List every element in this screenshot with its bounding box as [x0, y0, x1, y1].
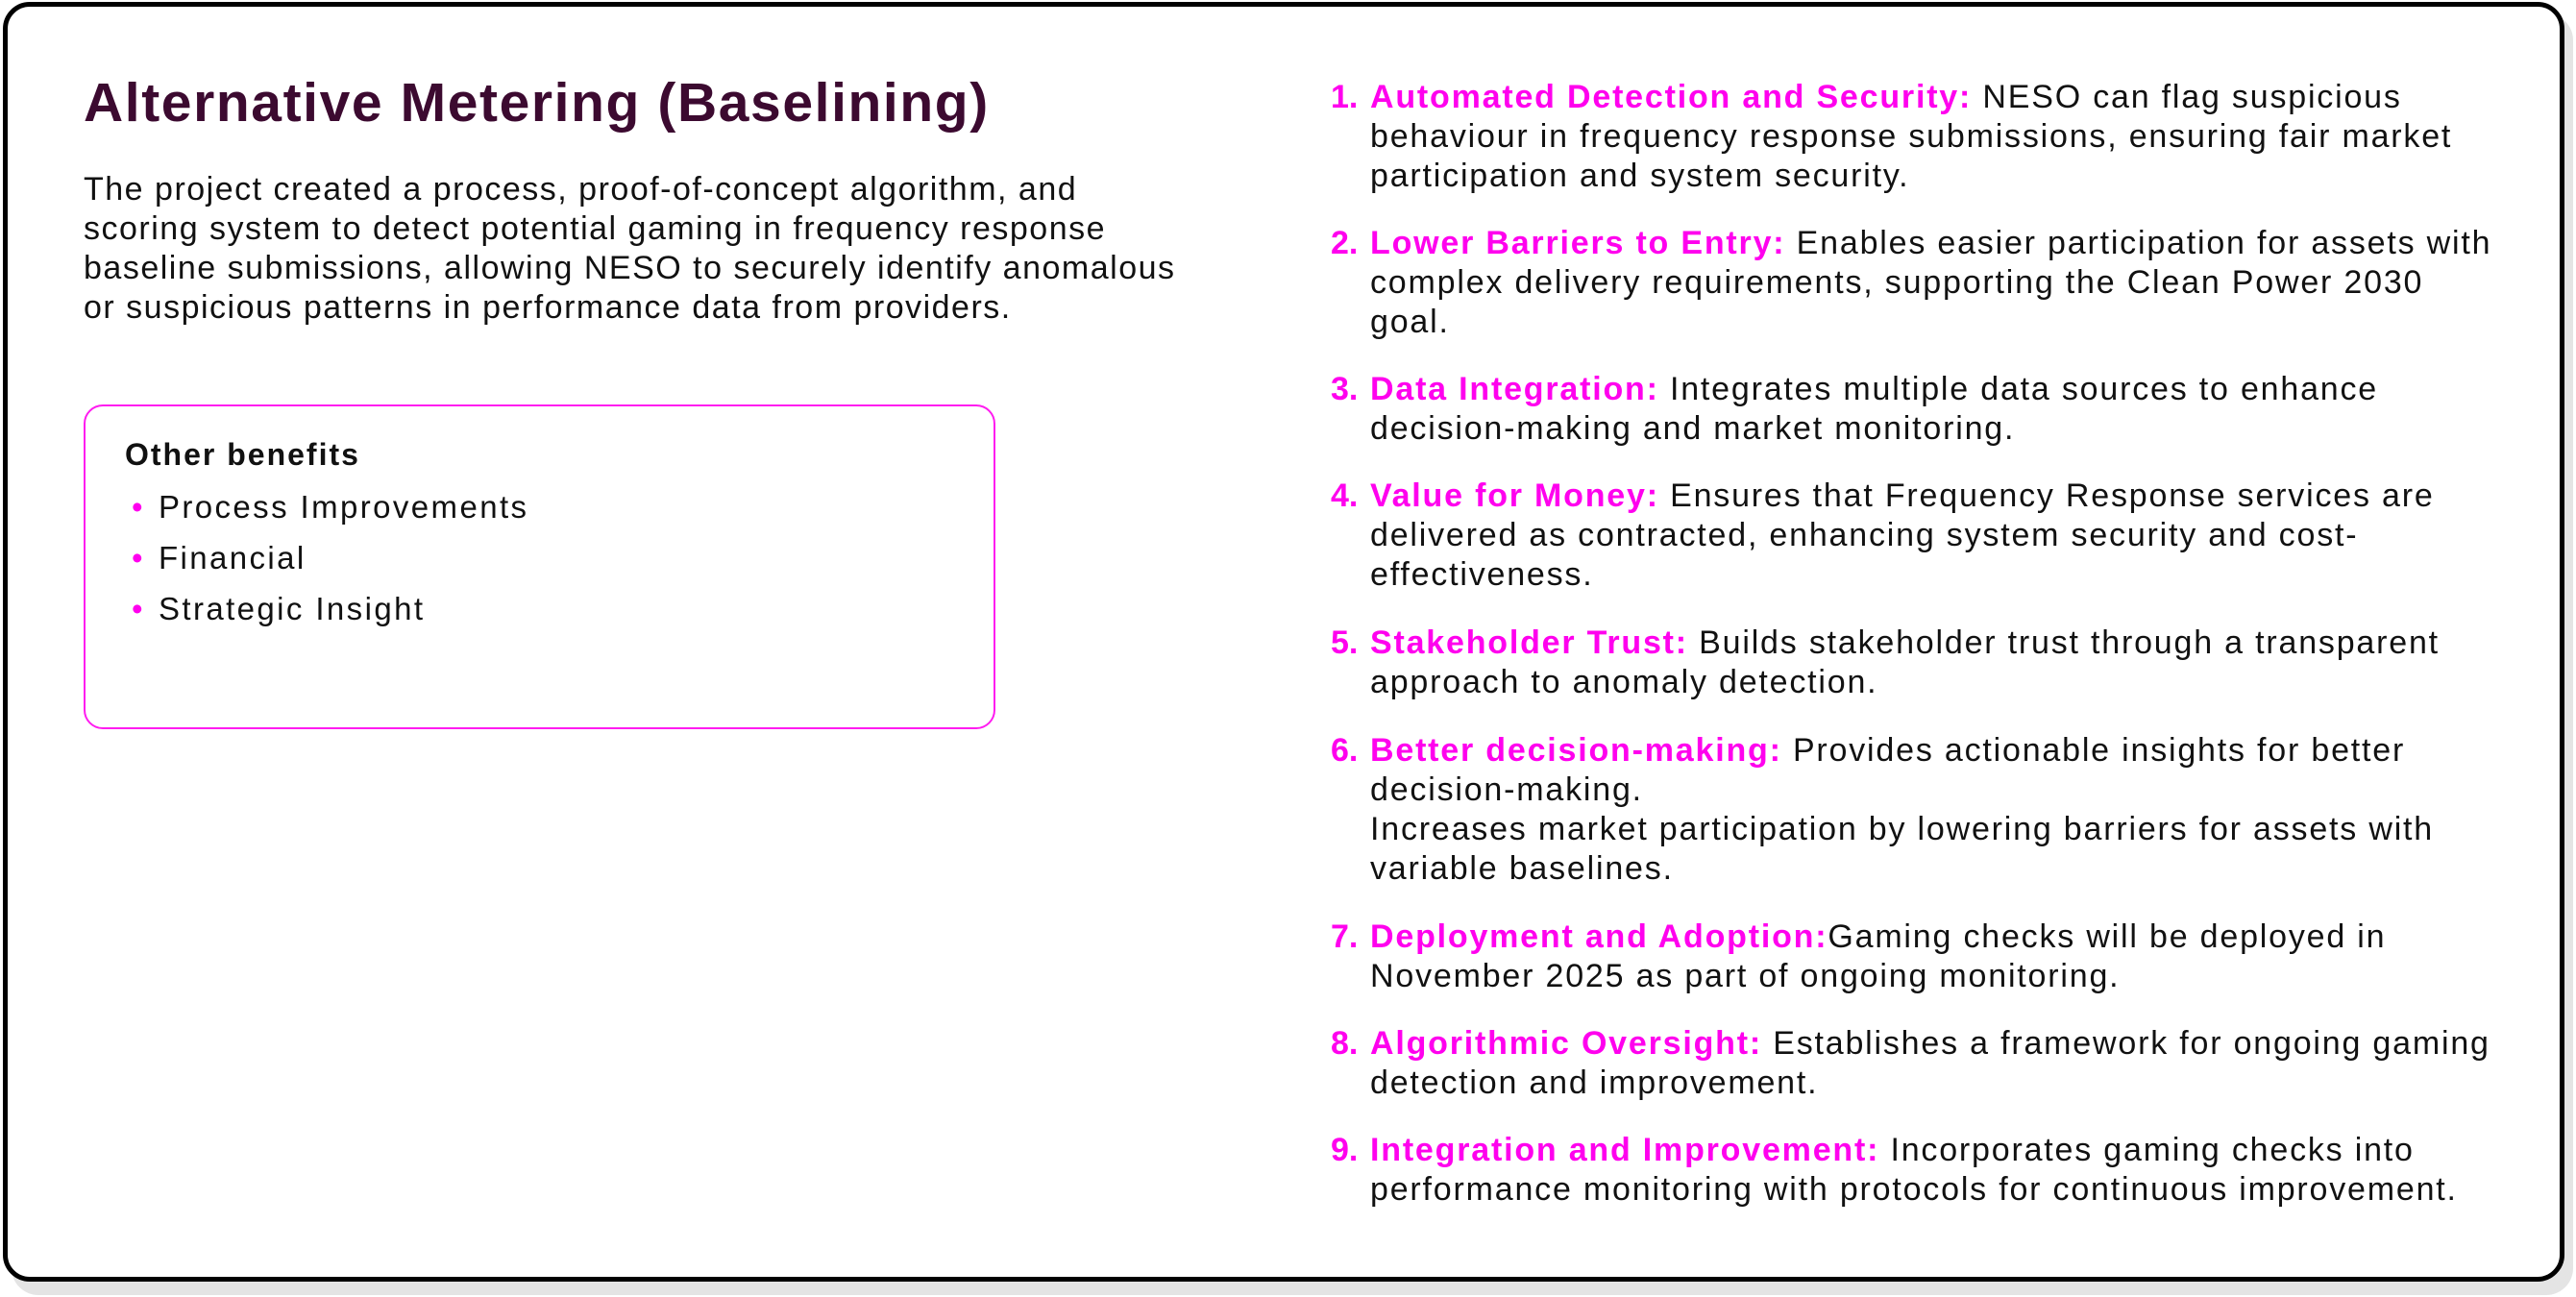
heading: other benefits: Other benefits — [125, 437, 360, 472]
list item 6 — [1331, 732, 2434, 887]
list item 7: 7. — [1331, 918, 1358, 955]
list item 6: decision-making. — [1370, 771, 1643, 808]
list item 3: Data Integration: Integrates multiple data sources to enhance — [1370, 371, 2378, 407]
list item 8: 8. — [1331, 1025, 1358, 1062]
list item 2: Lower Barriers to Entry: Enables easier participation for assets with — [1370, 225, 2491, 261]
list item 7: Deployment and Adoption:Gaming checks will be deployed in — [1370, 918, 2386, 955]
bullet list: • Financial — [132, 540, 307, 575]
list item 9: Integration and Improvement: Incorporates gaming checks into — [1370, 1132, 2415, 1168]
list item 3 — [1331, 371, 2378, 447]
title: Alternative Metering (Baselining) — [84, 72, 990, 134]
bullet list — [132, 489, 528, 626]
list item 8 — [1331, 1025, 2490, 1101]
list item 6: Increases market participation by lowering barriers for assets with — [1370, 811, 2434, 847]
bullet list: • Strategic Insight — [132, 591, 425, 626]
list item 9 — [1331, 1132, 2458, 1208]
list item 5: approach to anomaly detection. — [1370, 664, 1877, 700]
list item 6: variable baselines. — [1370, 850, 1674, 887]
list item 8: Algorithmic Oversight: Establishes a framework for ongoing gaming — [1370, 1025, 2490, 1062]
list item 4: Value for Money: Ensures that Frequency Response services are — [1370, 477, 2435, 514]
list item 5: 5. — [1331, 624, 1358, 661]
list item 3: 3. — [1331, 371, 1358, 407]
list item 5 — [1331, 624, 2440, 700]
list item 2: goal. — [1370, 304, 1450, 340]
panel: other benefits — [84, 404, 995, 729]
list item 5: Stakeholder Trust: Builds stakeholder trust through a transparent — [1370, 624, 2440, 661]
list item 1: behaviour in frequency response submissions, ensuring fair market — [1370, 118, 2452, 155]
list item 6: 6. — [1331, 732, 1358, 769]
list item 4 — [1331, 477, 2435, 593]
list item 1: Automated Detection and Security: NESO can flag suspicious — [1370, 79, 2402, 115]
list item 9: performance monitoring with protocols for continuous improvement. — [1370, 1171, 2458, 1208]
intro paragraph — [84, 171, 1176, 326]
list item 4: effectiveness. — [1370, 556, 1593, 593]
list item 7 — [1331, 918, 2386, 994]
list item 8: detection and improvement. — [1370, 1065, 1818, 1101]
intro paragraph: or suspicious patterns in performance data from providers. — [84, 289, 1012, 326]
list item 4: 4. — [1331, 477, 1358, 514]
list item 4: delivered as contracted, enhancing system security and cost- — [1370, 517, 2358, 553]
list item 3: decision-making and market monitoring. — [1370, 410, 2015, 447]
intro paragraph: scoring system to detect potential gaming in frequency response — [84, 210, 1106, 247]
list item 7: November 2025 as part of ongoing monitoring. — [1370, 958, 2120, 994]
intro paragraph: baseline submissions, allowing NESO to securely identify anomalous — [84, 250, 1176, 286]
list item 6: Better decision-making: Provides actionable insights for better — [1370, 732, 2405, 769]
list item 9: 9. — [1331, 1132, 1358, 1168]
list item 2 — [1331, 225, 2491, 340]
list item 1: participation and system security. — [1370, 158, 1909, 194]
intro paragraph: The project created a process, proof-of-concept algorithm, and — [84, 171, 1077, 208]
list item 2: 2. — [1331, 225, 1358, 261]
list item 1 — [1331, 79, 2452, 194]
list item 1: 1. — [1331, 79, 1358, 115]
list item 2: complex delivery requirements, supporting the Clean Power 2030 — [1370, 264, 2423, 301]
bullet list: • Process Improvements — [132, 489, 528, 525]
